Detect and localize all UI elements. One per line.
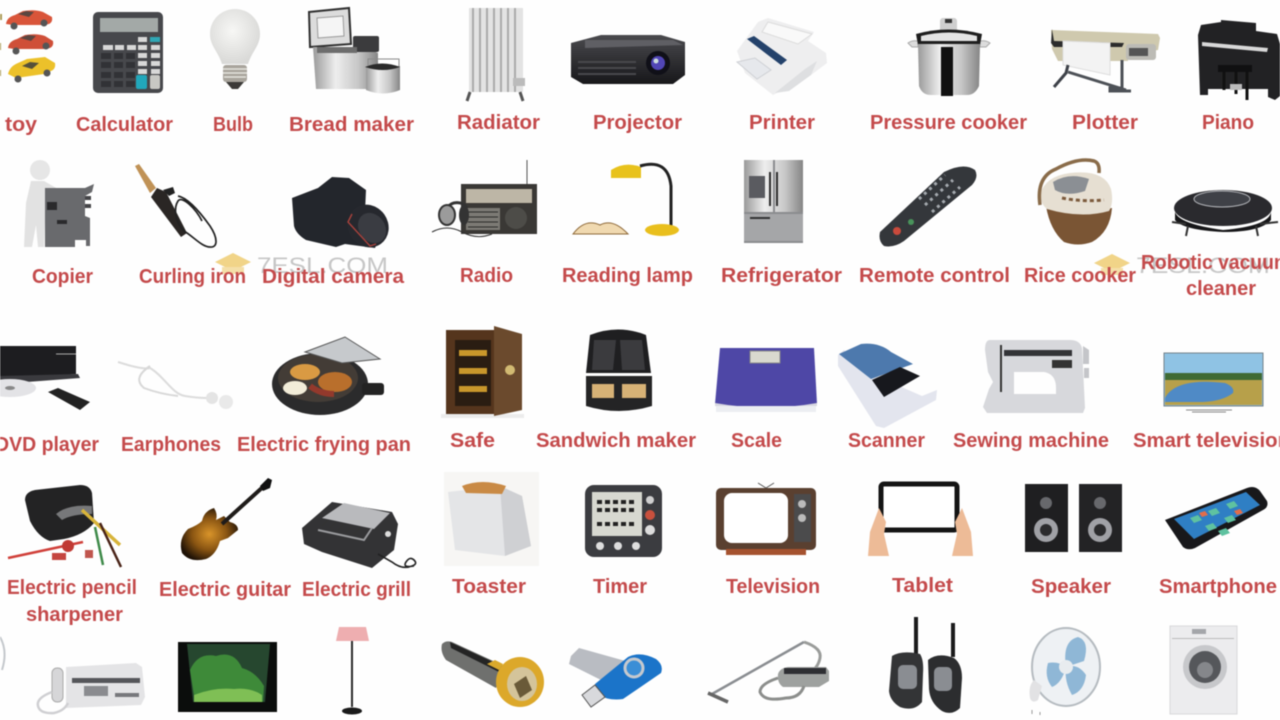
icon: electric frying pan bbox=[272, 337, 384, 415]
label: Bulb: Bulb bbox=[213, 114, 253, 136]
icon: aquarium bbox=[178, 642, 277, 712]
label: Electric pencil sharpener: sharpener bbox=[26, 604, 123, 626]
icon: pencil sharpener with pencils bbox=[8, 485, 121, 567]
item: Digital camera bbox=[262, 177, 405, 288]
watermark: right bbox=[1094, 253, 1270, 278]
label: toy: toy bbox=[5, 114, 38, 136]
icon: bread maker bbox=[309, 8, 400, 94]
icon: fax machine bbox=[38, 663, 145, 713]
item: Reading lamp bbox=[562, 164, 693, 287]
icon: bathroom scale bbox=[715, 348, 817, 412]
icon: canister vacuum cleaner bbox=[708, 642, 829, 702]
item: Electric pencil sharpener bbox=[7, 485, 137, 626]
label: Electric pencil sharpener: Electric pencil bbox=[7, 577, 137, 599]
icon: pressure cooker bbox=[908, 18, 990, 96]
item: toy bbox=[0, 10, 55, 136]
item: Printer bbox=[737, 18, 827, 134]
icon: toaster bbox=[444, 472, 539, 566]
label: Rice cooker: Rice cooker bbox=[1024, 265, 1136, 287]
label: Piano: Piano bbox=[1202, 112, 1254, 134]
icon: USB flash drive bbox=[569, 648, 662, 707]
watermark: left: 7ESL.COM bbox=[257, 253, 388, 278]
label: Safe: Safe bbox=[450, 430, 495, 452]
label: Radiator: Radiator bbox=[457, 112, 540, 134]
item: Curling iron bbox=[135, 164, 246, 288]
item: Timer bbox=[585, 485, 662, 598]
label: Timer: Timer bbox=[593, 576, 647, 598]
label: Smartphone: Smartphone bbox=[1159, 576, 1277, 598]
icon: robot vacuum bbox=[1172, 190, 1278, 236]
item: DVD player bbox=[0, 346, 99, 456]
item: Speaker bbox=[1025, 484, 1122, 598]
icon: digital upright piano bbox=[1198, 20, 1280, 100]
icon: multifunction printer bbox=[737, 18, 827, 95]
icon: wall fan bbox=[1030, 628, 1100, 715]
icon: electric guitar bbox=[181, 478, 272, 560]
item: Smart television bbox=[1133, 353, 1280, 452]
item: Copier bbox=[24, 160, 94, 288]
label: Copier: Copier bbox=[32, 266, 93, 288]
label: Printer: Printer bbox=[749, 112, 815, 134]
icon: DVD player with remote bbox=[0, 346, 90, 410]
item: Calculator bbox=[76, 12, 173, 136]
icon: electric grill bbox=[302, 502, 416, 568]
icon: earphones bbox=[118, 362, 233, 409]
item: Electric grill bbox=[302, 502, 416, 601]
icon: sandwich maker bbox=[586, 330, 652, 411]
label: Calculator: Calculator bbox=[76, 114, 173, 136]
label: Bread maker: Bread maker bbox=[289, 114, 414, 136]
item: Earphones bbox=[118, 362, 233, 456]
icon: oil radiator bbox=[467, 8, 525, 101]
label: Television: Television bbox=[726, 576, 820, 598]
label: Projector: Projector bbox=[593, 112, 682, 134]
icon: radio with headphones bbox=[432, 160, 537, 237]
label: Plotter: Plotter bbox=[1072, 112, 1138, 134]
icon: safe bbox=[441, 326, 524, 418]
label: Sandwich maker: Sandwich maker bbox=[536, 430, 696, 452]
item: Smartphone bbox=[1159, 487, 1277, 598]
icon: flatbed scanner bbox=[838, 344, 937, 428]
icon: walkie-talkies bbox=[889, 617, 962, 713]
icon: plotter bbox=[1051, 29, 1160, 91]
item: Sandwich maker bbox=[536, 330, 696, 452]
icon: light bulb bbox=[210, 9, 260, 89]
label: Electric guitar: Electric guitar bbox=[159, 579, 291, 601]
label: Speaker: Speaker bbox=[1031, 576, 1111, 598]
icon: toy cars bbox=[0, 10, 55, 83]
item: Television bbox=[716, 483, 820, 598]
item: Plotter bbox=[1051, 29, 1160, 134]
item: Rice cooker bbox=[1024, 160, 1136, 287]
item: Radiator bbox=[457, 8, 540, 134]
item: Piano bbox=[1198, 20, 1280, 134]
label: Radio: Radio bbox=[460, 265, 513, 287]
icon: smart television bbox=[1164, 353, 1263, 412]
item: Safe bbox=[441, 326, 524, 452]
item: Pressure cooker bbox=[870, 18, 1027, 134]
item: Electric guitar bbox=[159, 478, 291, 601]
item: Toaster bbox=[444, 472, 539, 598]
label: Toaster: Toaster bbox=[452, 576, 526, 598]
icon: curling iron bbox=[135, 164, 216, 247]
label: Electric frying pan: Electric frying pan bbox=[237, 434, 411, 456]
watermark: left bbox=[215, 253, 388, 278]
item: Radio bbox=[432, 160, 537, 287]
label: Scanner: Scanner bbox=[848, 430, 925, 452]
icon: remote control bbox=[880, 166, 976, 246]
item: Bread maker bbox=[289, 8, 414, 136]
icon: digital camera bbox=[292, 177, 397, 255]
icon: calculator bbox=[93, 12, 163, 93]
icon: refrigerator bbox=[744, 160, 803, 243]
label: Remote control: Remote control bbox=[859, 265, 1010, 287]
icon: sewing machine bbox=[983, 340, 1089, 413]
icon: rice cooker bbox=[1039, 160, 1112, 244]
label: Refrigerator: Refrigerator bbox=[721, 265, 842, 287]
icon: digital timer bbox=[585, 485, 662, 557]
item: Sewing machine bbox=[953, 340, 1109, 452]
icon: retro television bbox=[716, 483, 816, 555]
item: Refrigerator bbox=[721, 160, 842, 287]
icon: washing machine bbox=[1170, 626, 1237, 714]
label: Tablet: Tablet bbox=[892, 575, 953, 597]
watermark: right: 7ESL.COM bbox=[1136, 253, 1270, 278]
label: Digital camera: Digital camera bbox=[262, 266, 405, 288]
icon: projector bbox=[571, 35, 685, 84]
item: Scanner bbox=[838, 344, 937, 452]
label: Sewing machine: Sewing machine bbox=[953, 430, 1109, 452]
label: Reading lamp: Reading lamp bbox=[562, 265, 693, 287]
icon: reading lamp with book bbox=[573, 164, 679, 236]
label: Scale: Scale bbox=[731, 430, 782, 452]
item: Projector bbox=[571, 35, 685, 134]
item: Scale bbox=[715, 348, 817, 452]
label: Earphones: Earphones bbox=[121, 434, 221, 456]
label: Robotic vacuum cleaner: cleaner bbox=[1186, 278, 1256, 300]
item: Tablet bbox=[868, 484, 973, 597]
item: Electric frying pan bbox=[237, 337, 411, 456]
item: Remote control bbox=[859, 166, 1010, 287]
icon: pair of speakers bbox=[1025, 484, 1122, 552]
icon: copier with figure bbox=[24, 160, 94, 247]
label: Curling iron: Curling iron bbox=[139, 266, 246, 288]
label: Electric grill: Electric grill bbox=[302, 579, 411, 601]
icon: hands holding tablet bbox=[868, 484, 973, 556]
item: Robotic vacuum cleaner bbox=[1141, 190, 1280, 300]
icon: fan edge bbox=[0, 637, 5, 670]
icon: smartphone bbox=[1165, 487, 1268, 549]
icon: flashlight bbox=[442, 641, 544, 707]
item: Bulb bbox=[210, 9, 260, 136]
icon: floor lamp bbox=[336, 627, 369, 714]
label: Pressure cooker: Pressure cooker bbox=[870, 112, 1027, 134]
